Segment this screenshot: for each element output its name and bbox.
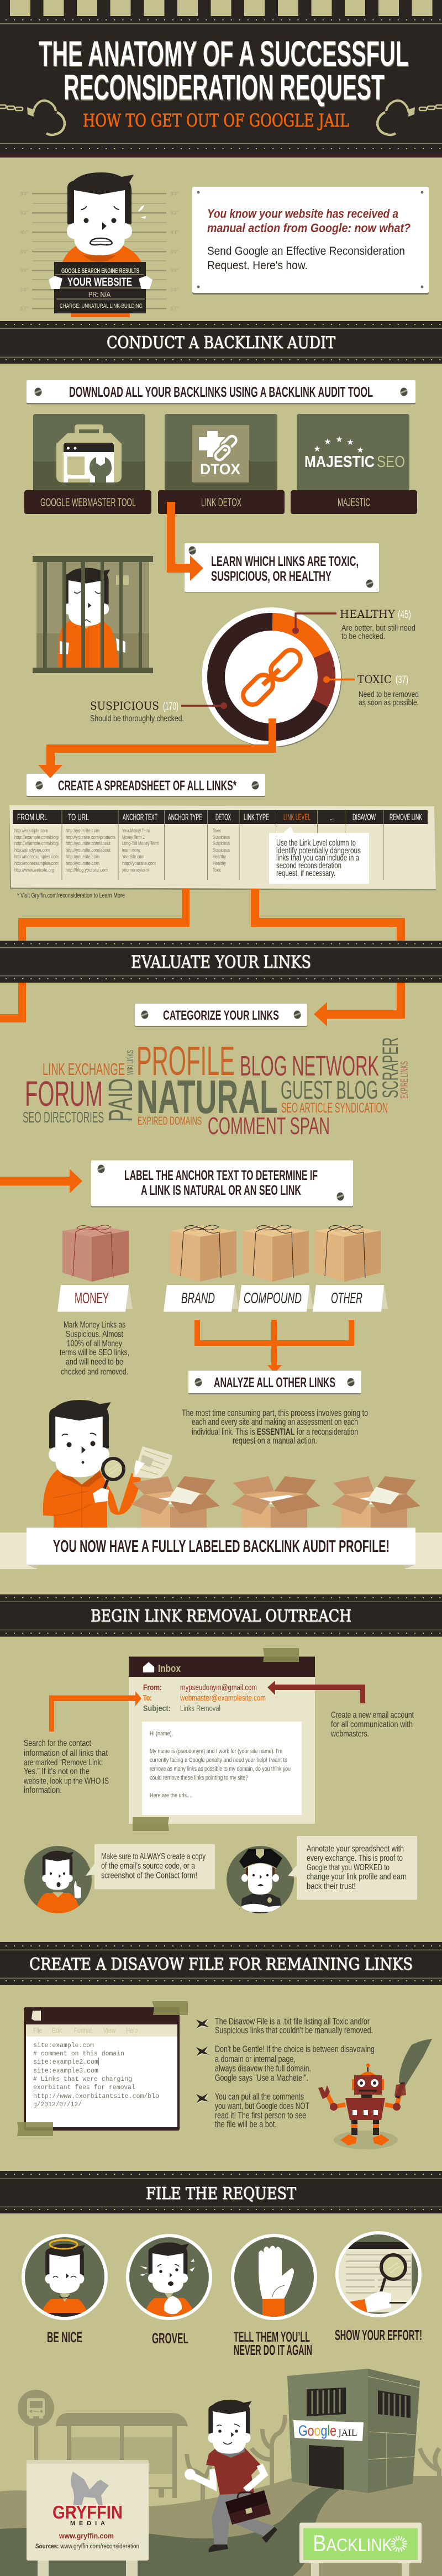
label: GROVEL	[152, 2330, 188, 2347]
sign: gryffin media: GRYFFIN	[52, 2502, 123, 2522]
character: walking free man	[185, 2400, 277, 2552]
email header fields: To:	[143, 1693, 152, 1703]
legend: suspicious: SUSPICIOUS	[90, 699, 159, 712]
file contents: http://www.exorbitantsite.com/blo	[33, 2093, 159, 2100]
question text: You know your website has received a	[207, 207, 398, 221]
tip two	[215, 2044, 375, 2083]
mugshot height chart: 6'1"	[20, 230, 28, 235]
tool: link detox: LINK DETOX	[201, 496, 241, 509]
table header	[17, 812, 422, 822]
callout: annotate spreadsheet: back their trust!	[307, 1882, 356, 1891]
step: never do it again: NEVER DO IT AGAIN	[234, 2342, 312, 2358]
tip one	[215, 2016, 373, 2035]
table header: TO URL	[68, 812, 89, 822]
sign: gryffin media: Sources: www.gryffin.com/reconsideration	[35, 2543, 139, 2550]
plate: create a spreadsheet: CREATE A SPREADSHEET OF ALL LINKS*	[58, 778, 236, 794]
answer text	[207, 245, 405, 272]
legend: toxic: TOXIC	[357, 673, 392, 686]
panel: email inbox: Here are the urls....	[150, 1792, 192, 1799]
table rows: http://blog.yoursite.com	[66, 867, 108, 873]
gift box: brand	[164, 1225, 239, 1312]
text: money links note: and will need to be	[66, 1357, 123, 1367]
legend: suspicious: Should be thoroughly checked.	[90, 714, 184, 723]
icon: bus	[27, 2398, 45, 2418]
table rows: Healthy	[213, 861, 226, 866]
callout: save source code	[86, 1844, 215, 1889]
question text: manual action from Google: now what?	[207, 221, 411, 235]
plate: analyze all other links	[188, 1371, 361, 1394]
table rows: Toxic	[213, 867, 221, 873]
table rows: YourSite.com	[122, 854, 144, 859]
mugshot height chart: 6'3"	[20, 191, 28, 196]
label: TELL THEM YOU’LL	[234, 2328, 310, 2345]
email header fields: webmaster@examplesite.com	[180, 1693, 266, 1703]
tip three: You can put all the comments	[215, 2091, 304, 2102]
briefcase	[225, 2490, 271, 2525]
avatar: police officer	[227, 1846, 294, 1915]
word cloud: SEO DIRECTORIES	[23, 1109, 104, 1126]
legend: toxic: Need to be removed	[359, 690, 419, 699]
sign: backlinko	[299, 2522, 422, 2576]
table header: DETOX	[215, 812, 231, 822]
table rows: Your Money Term	[122, 828, 150, 833]
door	[309, 2445, 344, 2490]
email header fields: From:	[143, 1683, 162, 1692]
table rows: http://yoursite.com/about	[66, 841, 110, 846]
tape	[263, 1648, 299, 1662]
legend: toxic: (37)	[396, 674, 408, 686]
word cloud: GUEST BLOG	[281, 1075, 378, 1104]
text: analyze paragraph: each and every site and making an assessment on each	[192, 1416, 358, 1427]
mugshot height chart: 6'0"	[20, 249, 28, 254]
table rows: http://yoursite.com/products	[66, 835, 115, 840]
text: analyze paragraph	[182, 1408, 368, 1446]
table rows: learn more	[122, 847, 140, 853]
legend: healthy: HEALTHY	[340, 607, 396, 621]
panel: email inbox: currently facing a Google penalty and need your help! I want to	[150, 1757, 287, 1764]
file contents: site:example2.com	[33, 2059, 98, 2066]
plate: learn which links	[185, 543, 379, 592]
illustration: robot with machete	[318, 2039, 432, 2149]
tip three: the file will be a bot.	[215, 2119, 277, 2129]
icon: x bullet	[196, 2094, 209, 2103]
email body	[142, 1722, 302, 1815]
table rows: http://www.website.org	[14, 867, 54, 873]
panel: notepad disavow file: Format	[74, 2026, 92, 2034]
table header: ANCHOR TEXT	[123, 812, 157, 822]
table rows: Suspicious	[213, 841, 230, 846]
avatar: prisoner with raised finger	[24, 1846, 92, 1918]
file contents	[33, 2042, 159, 2108]
tip three	[215, 2091, 309, 2129]
icon: notepad	[31, 2011, 41, 2021]
heading plate: download backlinks	[27, 380, 415, 405]
section band: conduct a backlink audit	[0, 321, 442, 364]
sign: gryffin media: www.gryffin.com	[59, 2531, 114, 2540]
text: analyze paragraph: request on a manual action.	[233, 1435, 317, 1446]
scene: bare trees	[187, 2415, 439, 2509]
panel: notepad disavow file: View	[103, 2026, 115, 2034]
tip one: The Disavow File is a .txt file listing all Toxic and/or	[215, 2016, 370, 2027]
panel: email inbox: Hi (name),	[150, 1730, 173, 1737]
email header fields: Links Removal	[180, 1704, 220, 1713]
placard	[54, 262, 146, 313]
footnote: * Visit Gryffin.com/reconsideration to Learn More	[17, 891, 125, 899]
legend: healthy: (45)	[398, 609, 411, 621]
sign: gryffin media: MEDIA	[70, 2520, 105, 2527]
mugshot height chart: 5'7"	[171, 306, 178, 311]
word cloud: LINK EXCHANGE	[43, 1059, 125, 1079]
paper	[133, 1446, 172, 1479]
callout: link level: Use the Link Level column to	[276, 838, 356, 848]
mugshot height chart: 6'3"	[171, 191, 178, 196]
callout: annotate spreadsheet: change your link profile and earn	[307, 1872, 407, 1881]
text: money links note: terms will be SEO links,	[60, 1348, 129, 1357]
word cloud: NATURAL	[136, 1071, 278, 1124]
icon: chain link	[239, 646, 304, 709]
mugshot height chart: 6'1"	[171, 230, 178, 235]
plate: analyze all other links: ANALYZE ALL OTHER LINKS	[214, 1375, 335, 1391]
tape	[152, 2001, 188, 2015]
tool: majestic: ★	[346, 438, 354, 447]
tool: google webmaster tool: GOOGLE WEBMASTER TOOL	[40, 496, 136, 509]
plate: categorize your links: CATEGORIZE YOUR LINKS	[163, 1008, 279, 1023]
tool: majestic: MAJESTIC	[304, 453, 375, 471]
panel: notepad disavow file	[17, 2001, 188, 2136]
sign: google jail: Google	[298, 2422, 336, 2439]
panel: notepad disavow file: File	[33, 2026, 42, 2034]
word cloud: EXPIRED DOMAINS	[138, 1115, 202, 1127]
file contents: # comment on this domain	[33, 2050, 124, 2058]
legend: healthy: Are better, but still need	[341, 623, 415, 633]
question text	[207, 207, 411, 235]
plate: label the anchor text: LABEL THE ANCHOR TEXT TO DETERMINE IF	[124, 1168, 318, 1183]
arrow: from field	[267, 1681, 365, 1703]
step: grovel	[126, 2234, 212, 2347]
table rows	[14, 828, 230, 873]
mugshot height chart: 5'9"	[171, 268, 178, 273]
legend: healthy: to be checked.	[341, 632, 385, 641]
table rows: Money Term 2	[122, 835, 145, 840]
table rows: http://example.com/blog/	[14, 841, 59, 846]
word cloud: EXPIRE LINKS	[399, 1061, 410, 1099]
machete	[399, 2039, 432, 2086]
arrow: from link detox to learn which links	[167, 502, 203, 581]
mugshot height chart: 6'2"	[171, 211, 178, 216]
answer text: Send Google an Effective Reconsideration	[207, 245, 405, 258]
text: create new email: for all communication with	[331, 1720, 413, 1729]
mugshot height chart: 5'9"	[20, 268, 28, 273]
plate: label the anchor text	[91, 1161, 353, 1207]
tag: other	[313, 1285, 388, 1312]
tag: money: MONEY	[75, 1289, 109, 1307]
tool: majestic: ★	[313, 444, 321, 454]
illustration: open boxes	[131, 1476, 420, 1528]
heading: BEGIN LINK REMOVAL OUTREACH	[91, 1607, 351, 1626]
subtitle: HOW TO GET OUT OF GOOGLE JAIL	[83, 110, 349, 131]
section band: create a disavow file	[0, 1942, 442, 1985]
table rows: http://yoursite.com	[122, 861, 156, 866]
panel: email inbox: could remove these links pointing to my site?	[150, 1775, 248, 1781]
plate: learn which links: SUSPICIOUS, OR HEALTHY	[211, 569, 332, 584]
table rows: http://example.com/blog/	[14, 835, 59, 840]
step: be nice	[22, 2234, 108, 2346]
label: BE NICE	[47, 2329, 82, 2346]
tip one: Suspicious links that couldn’t be manually removed.	[215, 2025, 373, 2035]
icon: right handcuff	[377, 101, 442, 135]
panel: intro card	[192, 187, 429, 295]
panel: email inbox: remove as many links as possible to my domain, do you think you	[150, 1766, 291, 1772]
banner: fully labeled audit profile	[0, 1528, 442, 1569]
table header: DISAVOW	[352, 812, 376, 822]
legend: suspicious: (170)	[163, 701, 178, 712]
step: never do it again	[231, 2234, 317, 2358]
title	[39, 34, 409, 107]
table rows: http://yoursite.com/about	[66, 847, 110, 853]
table: spreadsheet of links	[9, 805, 436, 890]
callout: save source code: screenshot of the Contact form!	[101, 1871, 197, 1880]
chart: link health donut	[202, 607, 341, 747]
tool: google webmaster tool	[24, 414, 151, 514]
sign: google jail: JAIL	[337, 2428, 357, 2438]
callout: save source code: of the email’s source code, or a	[101, 1861, 195, 1871]
table rows: http://moreexamples.com	[14, 854, 59, 859]
icon: toolbox	[56, 424, 122, 482]
arrow: bracket to analyze	[194, 1320, 354, 1373]
table header: ANCHOR TYPE	[168, 812, 202, 822]
tool: majestic	[291, 414, 417, 514]
tool: majestic: ★	[324, 437, 332, 447]
list: disavow tips	[196, 2016, 375, 2129]
file contents: exorbitant fees for removal	[33, 2084, 135, 2091]
text: money links note	[60, 1320, 129, 1377]
tag: money	[57, 1285, 133, 1312]
panel: email inbox: Inbox	[158, 1663, 181, 1674]
table rows: http://yoursite.com	[66, 828, 99, 833]
callout: link level: identify potentially dangerous	[276, 846, 361, 856]
callout: link level: request, if necessary.	[276, 869, 335, 878]
placard: YOUR WEBSITE	[67, 276, 132, 288]
gift box: compound	[238, 1225, 313, 1312]
table header: LINK TYPE	[244, 812, 269, 822]
tool: link detox: DTOX	[200, 461, 240, 478]
table rows: Suspicious	[213, 835, 230, 840]
icon: x bullet	[196, 2047, 209, 2057]
callout: annotate spreadsheet	[288, 1836, 417, 1900]
callout: annotate spreadsheet: Annotate your spreadsheet with	[307, 1844, 404, 1854]
scene: hills	[0, 2476, 442, 2576]
text: create new email: Create a new email account	[331, 1711, 414, 1720]
text: search contact info: Search for the contact	[24, 1739, 91, 1748]
mugshot height chart: 5'8"	[171, 287, 178, 292]
word cloud: PAID	[102, 1078, 139, 1122]
callout: link level: links that you can include in a	[276, 853, 359, 863]
text: money links note: Suspicious. Almost	[66, 1330, 123, 1339]
panel: notepad disavow file: Edit	[52, 2026, 62, 2034]
text: analyze paragraph: The most time consuming part, this process involves going to	[182, 1408, 368, 1418]
icon: envelope	[143, 1662, 154, 1672]
mugshot height chart	[20, 191, 178, 311]
tip three: you want, but Google does NOT	[215, 2101, 309, 2111]
table rows: http://yoursite.com	[66, 854, 99, 859]
word cloud: PROFILE	[136, 1038, 235, 1084]
tool: majestic: SEO	[377, 453, 405, 471]
tag: compound: COMPOUND	[244, 1289, 302, 1307]
tool: majestic: MAJESTIC	[338, 496, 370, 509]
legend: toxic	[323, 673, 419, 707]
panel: notepad disavow file: Help	[126, 2026, 138, 2034]
plate: label the anchor text: A LINK IS NATURAL OR AN SEO LINK	[141, 1183, 301, 1198]
word cloud	[23, 1037, 410, 1140]
file contents: site:example3.com	[33, 2068, 98, 2075]
text: money links note: checked and removed.	[61, 1367, 128, 1377]
character: mugshot prisoner	[49, 172, 152, 317]
legend: toxic: as soon as possible.	[359, 698, 419, 707]
placard: CHARGE: UNNATURAL LINK-BUILDING	[60, 303, 143, 309]
mugshot height chart: 5'7"	[20, 306, 28, 311]
legend: healthy	[292, 607, 415, 641]
text: create new email	[330, 1711, 414, 1739]
placard: GOOGLE SEARCH ENGINE RESULTS	[61, 267, 139, 275]
file contents: g/2012/07/12/	[33, 2101, 82, 2108]
answer text: Request. Here's how.	[207, 259, 308, 272]
callout: link level	[269, 826, 369, 884]
file contents: # Links that were charging	[33, 2076, 132, 2083]
arrow: into anchor text plate	[0, 1169, 82, 1193]
gift box: money	[57, 1225, 133, 1312]
table rows: Suspicious	[213, 847, 230, 853]
step: show your effort	[332, 2231, 422, 2343]
email header fields: Subject:	[143, 1704, 171, 1713]
tool: link detox	[158, 414, 285, 514]
panel: email inbox	[129, 1648, 315, 1831]
callout: link level: second reconsideration	[276, 861, 341, 870]
icon: left handcuff	[0, 101, 65, 135]
illustration: man in jail cell	[33, 556, 153, 673]
mugshot height chart: 6'0"	[171, 249, 178, 254]
table rows: yourmoneyterm	[122, 867, 149, 873]
word cloud: FORUM	[25, 1074, 103, 1114]
text: search contact info: information of all links that	[24, 1749, 108, 1758]
table rows: http://moreexamples.com	[14, 861, 59, 866]
tip two: a domain or internal page,	[215, 2054, 296, 2064]
arrow: spreadsheet left branch to anchor text	[0, 889, 190, 1022]
logo: griffin	[71, 2472, 109, 2505]
building: google jail	[287, 2369, 420, 2493]
email header fields: mypseudonym@gmail.com	[180, 1683, 257, 1692]
heading: CONDUCT A BACKLINK AUDIT	[107, 333, 335, 353]
text: analyze paragraph: individual link. This is ESSENTIAL for a reconsideration	[192, 1426, 358, 1437]
table header: FROM URL	[17, 812, 48, 822]
character: investigator with magnifier	[43, 1400, 172, 1528]
arrow: spreadsheet right branch to categorize	[251, 889, 405, 1026]
table header: ...	[330, 812, 334, 822]
tip three: read it! The first person to see	[215, 2110, 306, 2121]
mugshot height chart: 6'2"	[20, 211, 28, 216]
file contents: site:example.com	[33, 2042, 94, 2049]
gift box: other	[313, 1225, 388, 1312]
text: money links note: Mark Money Links as	[64, 1320, 125, 1330]
email header fields	[143, 1683, 266, 1713]
icon: x bullet	[196, 2019, 209, 2029]
sign: gryffin media	[27, 2460, 149, 2576]
arrow: donut to spreadsheet	[38, 718, 276, 778]
tag: brand	[164, 1285, 239, 1312]
text: search contact info: information.	[24, 1786, 62, 1795]
word cloud: SCRAPER	[378, 1037, 403, 1098]
word cloud: COMMENT SPAN	[208, 1113, 330, 1140]
placard: PR: N/A	[88, 290, 110, 298]
heading: FILE THE REQUEST	[146, 2184, 296, 2203]
table rows: http://example.com	[14, 828, 48, 833]
word cloud: WIKI LINKS	[126, 1050, 135, 1075]
section band: evaluate your links	[0, 941, 442, 983]
tip two: Don't be Gentle! If the choice is between disavowing	[215, 2044, 375, 2054]
sign: google jail	[293, 2420, 364, 2441]
section band: begin link removal outreach	[0, 1594, 442, 1637]
text: search contact info: website, look up the WHO IS	[23, 1776, 109, 1786]
mugshot height chart: 5'8"	[20, 287, 28, 292]
tag: other: OTHER	[331, 1289, 362, 1307]
text: search contact info: Yes.” If it’s not on the	[24, 1767, 90, 1776]
text: create new email: webmasters.	[330, 1729, 369, 1739]
plate: categorize your links	[135, 1004, 307, 1027]
table rows: http://shadyseo.com	[14, 847, 50, 853]
windows	[307, 2388, 411, 2418]
table rows: http://yoursite.com	[66, 861, 99, 866]
tip two: Google says "Use a Machete!".	[215, 2073, 308, 2083]
plate: learn which links: LEARN WHICH LINKS ARE TOXIC,	[211, 554, 359, 569]
text: search contact info: are marked “Remove Link:	[24, 1758, 103, 1767]
magnifying glass	[93, 1458, 124, 1503]
arrow: to field	[49, 1691, 141, 1732]
tool: majestic: ★	[356, 445, 364, 455]
callout: save source code: Make sure to ALWAYS create a copy	[101, 1852, 206, 1861]
tool: majestic: ★	[335, 435, 343, 444]
table rows: Toxic	[213, 828, 221, 833]
header band	[0, 0, 442, 158]
tag: compound	[238, 1285, 313, 1312]
sign: backlinko: BACKLINK	[313, 2530, 392, 2556]
plate: create a spreadsheet	[27, 774, 265, 797]
heading: EVALUATE YOUR LINKS	[131, 952, 311, 972]
legend: suspicious	[90, 699, 227, 723]
panel: email inbox: My name is (pseudonym) and I work for (your site name). I'm	[150, 1748, 282, 1755]
table rows: Long-Tail Money Term	[122, 841, 159, 846]
tag: brand: BRAND	[181, 1289, 215, 1307]
scene: bus stop	[18, 2390, 188, 2498]
text: search contact info	[23, 1739, 109, 1795]
text: money links note: 100% of all Money	[67, 1339, 122, 1349]
table rows: Healthy	[213, 854, 226, 859]
callout: annotate spreadsheet: Google that you WORKED to	[307, 1863, 390, 1872]
icon: halo	[50, 2240, 77, 2249]
callout: annotate spreadsheet: every exchange. This is proof to	[307, 1854, 403, 1863]
tip two: always disavow the full domain.	[215, 2063, 311, 2074]
table header: LINK LEVEL	[283, 812, 311, 822]
section band: file the request	[0, 2171, 442, 2213]
